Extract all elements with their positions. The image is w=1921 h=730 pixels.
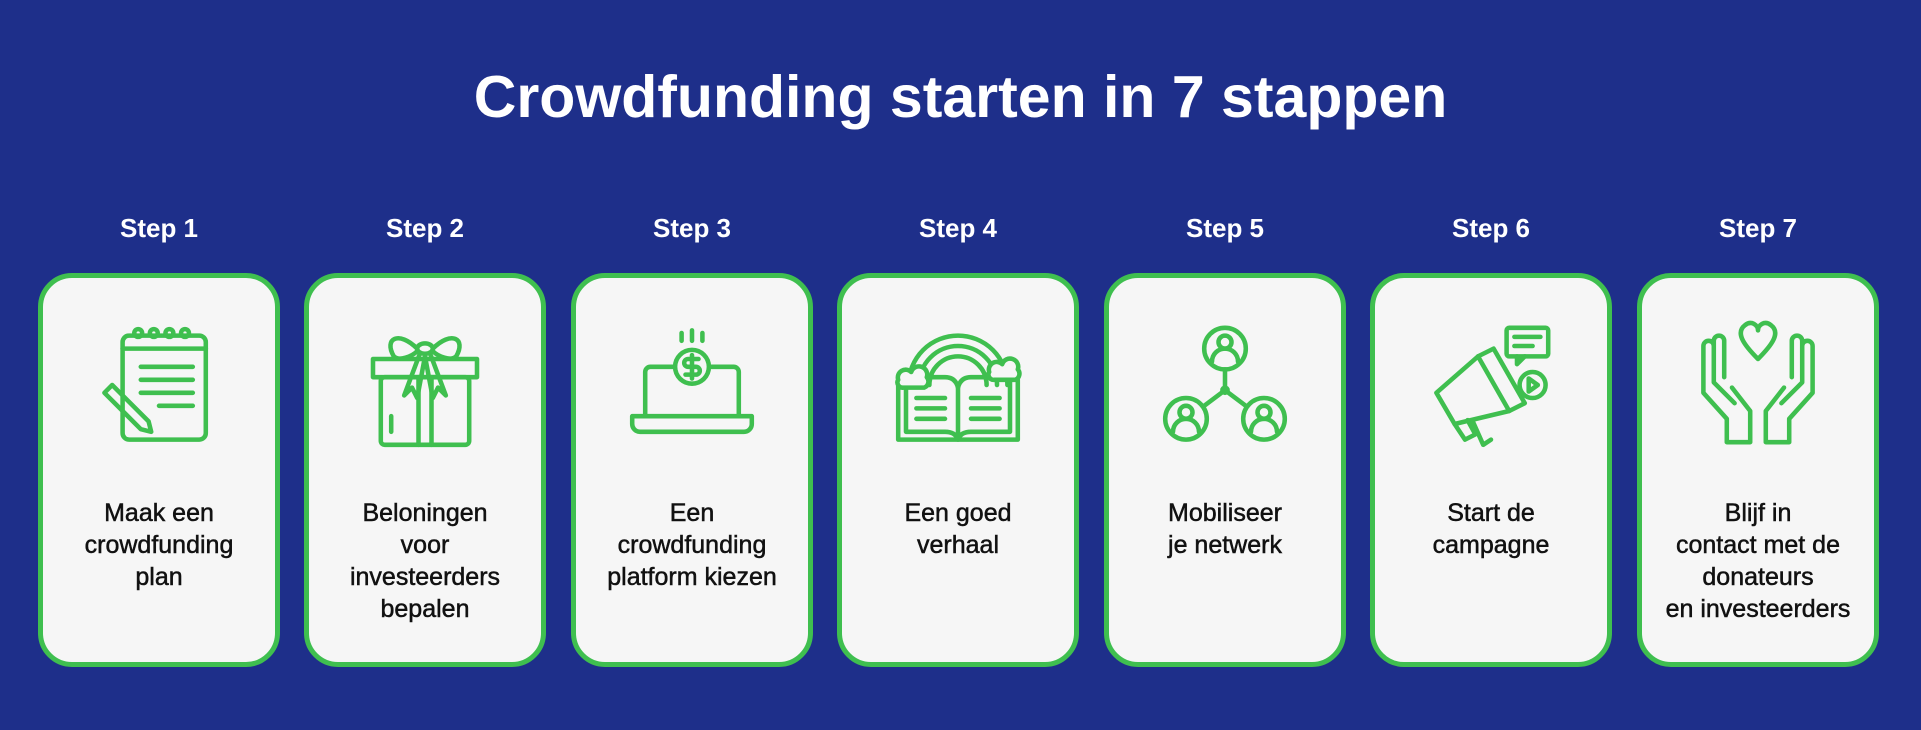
- text: plan: [135, 563, 183, 591]
- step label 7: Step 7: [1719, 213, 1797, 243]
- step label 6: Step 6: [1452, 213, 1530, 243]
- step label 2: Step 2: [386, 213, 464, 243]
- text: [904, 499, 1012, 559]
- icon: gift: [370, 336, 480, 448]
- icon: hands with heart: [1701, 320, 1815, 444]
- text: platform kiezen: [607, 563, 777, 591]
- panel: step 5: [1104, 273, 1346, 667]
- text: verhaal: [917, 531, 999, 559]
- text: en investeerders: [1666, 595, 1850, 623]
- step label 1: Step 1: [120, 213, 198, 243]
- step label 3: Step 3: [653, 213, 731, 243]
- text: [607, 499, 777, 591]
- text: contact met de: [1676, 531, 1840, 559]
- text: [1167, 499, 1282, 559]
- panel: step 7: [1637, 273, 1879, 667]
- text: donateurs: [1702, 563, 1814, 591]
- text: Een: [670, 499, 714, 527]
- text: Een goed: [904, 499, 1012, 527]
- text: Blijf in: [1725, 499, 1791, 527]
- text: Beloningen: [362, 499, 488, 527]
- step label 5: Step 5: [1186, 213, 1264, 243]
- icon: network of people: [1162, 326, 1288, 442]
- icon: laptop with coin: [630, 328, 754, 434]
- text: crowdfunding: [85, 531, 233, 559]
- panel: step 3: [571, 273, 813, 667]
- text: campagne: [1433, 531, 1549, 559]
- text: [350, 499, 500, 623]
- icon: megaphone: [1434, 326, 1550, 448]
- icon: notepad with pencil: [102, 326, 208, 442]
- text: [85, 499, 233, 591]
- text: bepalen: [380, 595, 469, 623]
- text: [1666, 499, 1850, 623]
- step label 4: Step 4: [919, 213, 997, 243]
- title: Crowdfunding starten in 7 stappen: [474, 64, 1447, 130]
- text: je netwerk: [1168, 531, 1282, 559]
- text: crowdfunding: [618, 531, 766, 559]
- text: Maak een: [104, 499, 214, 527]
- text: Start de: [1447, 499, 1535, 527]
- text: investeerders: [350, 563, 500, 591]
- panel: step 6: [1370, 273, 1612, 667]
- text: [1433, 499, 1549, 559]
- text: voor: [401, 531, 449, 559]
- icon: storybook with rainbow: [895, 333, 1022, 442]
- panel: step 1: [38, 273, 280, 667]
- panel: step 2: [304, 273, 546, 667]
- panel: step 4: [837, 273, 1079, 667]
- text: Mobiliseer: [1168, 499, 1282, 527]
